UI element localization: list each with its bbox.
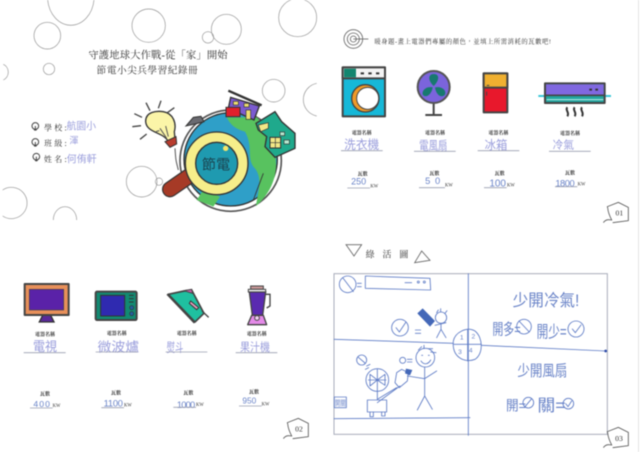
icon: bulb bullet school bbox=[32, 123, 39, 131]
comic frame bbox=[334, 274, 607, 435]
wattage fields: KW bbox=[370, 184, 379, 189]
wattage fields: 瓦數 bbox=[249, 389, 259, 396]
scene 2: quote turn on less AC bbox=[492, 291, 584, 342]
icon: blender bbox=[248, 286, 270, 325]
student info fields: 姓名: bbox=[44, 154, 67, 164]
icon: magnifier bbox=[170, 132, 248, 195]
illustration: globe, magnifier, bulb and houses bbox=[132, 91, 295, 211]
title bbox=[88, 49, 228, 76]
wattage fields: 瓦數 bbox=[358, 170, 368, 177]
icon: television bbox=[25, 284, 69, 322]
scene 4: quote turn on less fan bbox=[506, 363, 574, 415]
appliance name fields: 果汁機 bbox=[240, 340, 270, 354]
wattage fields: 瓦數 bbox=[183, 389, 193, 396]
page number 02: 02 bbox=[295, 424, 303, 433]
center number circle bbox=[453, 329, 481, 361]
wattage fields: KW bbox=[196, 403, 204, 408]
scene 3: person and fan: 開關 bbox=[335, 398, 346, 407]
page number 01 bbox=[603, 202, 628, 223]
scene 4: quote turn on less fan: 開= bbox=[506, 397, 526, 413]
icon: clothes iron bbox=[167, 289, 209, 323]
icon: refrigerator bbox=[484, 73, 507, 112]
icon: light bulb bbox=[132, 101, 178, 170]
panel: page 03 green living comic bbox=[334, 245, 628, 448]
appliance name fields bbox=[24, 330, 277, 355]
wattage fields: 250 bbox=[351, 177, 366, 187]
wattage fields: 瓦數 bbox=[429, 170, 439, 177]
wattage fields: 50 bbox=[425, 176, 440, 186]
instruction heading bbox=[344, 30, 551, 48]
student info fields bbox=[32, 119, 97, 166]
icon: globe bbox=[180, 110, 281, 211]
wattage fields bbox=[30, 389, 270, 410]
scene 2: quote turn on less AC: 少開冷氣! bbox=[513, 291, 579, 310]
student info fields: 航園小 bbox=[67, 119, 96, 132]
center number circle: 3 bbox=[458, 349, 462, 356]
wattage fields: 1000 bbox=[177, 400, 195, 410]
scene 1: air conditioner and remote bbox=[339, 276, 447, 338]
wattage fields: KW bbox=[262, 402, 270, 407]
appliance name fields: 洗衣機 bbox=[344, 137, 379, 152]
wattage fields: KW bbox=[578, 183, 586, 188]
appliance name fields bbox=[341, 129, 591, 153]
appliance name fields: 電器名稱 bbox=[352, 130, 372, 137]
wattage fields: 100 bbox=[489, 179, 506, 190]
icon: plug bbox=[186, 116, 204, 126]
student info fields: 何侑軒 bbox=[67, 153, 97, 166]
heading: 綠活圖 bbox=[366, 249, 408, 260]
appliance name fields: 電器名稱 bbox=[560, 130, 580, 137]
page number 03: 03 bbox=[615, 434, 623, 443]
appliance name fields: 電器名稱 bbox=[247, 331, 267, 338]
appliance name fields: 電風扇 bbox=[419, 139, 447, 153]
appliance name fields: 電器名稱 bbox=[177, 330, 197, 337]
wattage fields: 瓦數 bbox=[495, 170, 505, 177]
center number circle: 2 bbox=[471, 334, 475, 341]
icon: bulb bullet name bbox=[33, 153, 40, 161]
icon: bulb bullet class bbox=[32, 139, 39, 147]
appliance name fields: 電視 bbox=[33, 339, 57, 354]
appliance name fields: 電器名稱 bbox=[425, 129, 445, 136]
scene 2: quote turn on less AC: 開多= bbox=[492, 320, 521, 338]
appliance name fields: 熨斗 bbox=[167, 341, 183, 355]
icon: washing machine bbox=[343, 67, 385, 116]
wattage fields: 瓦數 bbox=[40, 391, 50, 398]
wattage fields: KW bbox=[507, 184, 515, 189]
icon: down triangle bbox=[346, 245, 362, 256]
icon: purple house bbox=[226, 91, 262, 120]
wattage fields bbox=[347, 169, 586, 190]
icon: magnifier: 節電 bbox=[202, 156, 230, 172]
student info fields: 學校: bbox=[44, 122, 67, 132]
appliance name fields: 冰箱 bbox=[485, 138, 508, 152]
appliance name fields: 微波爐 bbox=[97, 339, 139, 354]
wattage fields: 1800 bbox=[555, 179, 575, 189]
decorative circles bbox=[3, 0, 317, 220]
student info fields: 班級: bbox=[44, 138, 67, 148]
center number circle: 4 bbox=[469, 348, 473, 355]
wattage fields: 瓦數 bbox=[565, 169, 575, 176]
wattage fields: 瓦數 bbox=[111, 390, 121, 397]
instruction heading: 暖身題-畫上電器們專屬的顏色，並填上所需消耗的瓦數吧! bbox=[374, 36, 551, 45]
wattage fields: KW bbox=[53, 404, 61, 409]
icon: electric fan bbox=[418, 71, 450, 115]
icon: target bbox=[344, 30, 368, 48]
scene 3: person and fan bbox=[334, 345, 437, 417]
scene 4: quote turn on less fan: 少開風扇 bbox=[517, 363, 567, 380]
wattage fields: KW bbox=[445, 184, 453, 189]
panel: cover page bbox=[3, 0, 317, 220]
appliance name fields: 電器名稱 bbox=[35, 331, 55, 338]
page number 01: 01 bbox=[616, 208, 623, 217]
wattage fields: 400 bbox=[33, 399, 50, 409]
scene 2: quote turn on less AC: 開少= bbox=[537, 323, 567, 342]
appliance name fields: 冷氣 bbox=[552, 139, 574, 152]
icon: air conditioner bbox=[538, 83, 611, 116]
page number 02 bbox=[283, 418, 308, 439]
title: 節電小尖兵學習紀錄冊 bbox=[97, 64, 198, 76]
appliance name fields: 電器名稱 bbox=[488, 129, 508, 136]
title: 守護地球大作戰-從「家」開始 bbox=[88, 49, 228, 62]
icon: microwave bbox=[96, 292, 137, 320]
scene 4: quote turn on less fan: 關= bbox=[537, 396, 566, 415]
panel: page 01 appliances bbox=[341, 30, 628, 223]
wattage fields: KW bbox=[124, 403, 132, 408]
icon: up triangle bbox=[415, 251, 430, 263]
wattage fields: 1100 bbox=[104, 398, 123, 408]
appliance name fields: 電器名稱 bbox=[107, 330, 127, 337]
center number circle: 1 bbox=[460, 334, 464, 341]
page number 03 bbox=[603, 427, 628, 448]
panel: page 02 appliances bbox=[24, 284, 308, 439]
heading bbox=[346, 245, 430, 263]
icon: teal house bbox=[256, 112, 295, 157]
wattage fields: 950 bbox=[242, 395, 257, 405]
student info fields: 渾 bbox=[69, 136, 78, 146]
